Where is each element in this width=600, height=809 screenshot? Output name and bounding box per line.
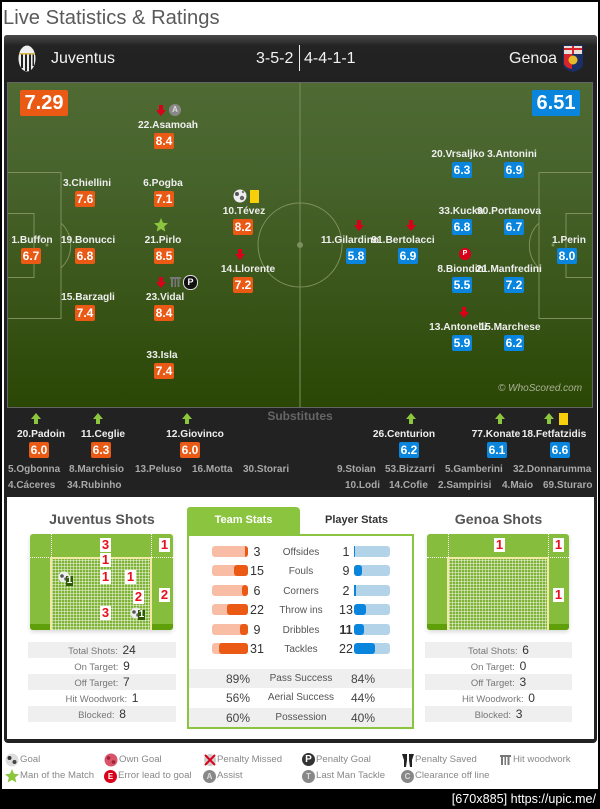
bench: Genoa: 69.Sturaro	[543, 480, 592, 491]
player: Bonucci: 6.8	[77, 249, 93, 263]
player: Pogba: 7.1	[156, 192, 172, 206]
legend: last man tackle	[302, 770, 315, 783]
chart: Juventus shot map: 1	[139, 609, 144, 620]
player: Tevez	[223, 206, 265, 235]
icon: penalty missed marker	[459, 248, 471, 260]
player: Pirlo	[144, 235, 181, 264]
bench: Juventus: 30.Storari	[243, 464, 289, 475]
chart: Genoa shot map: 1	[496, 537, 503, 552]
player: Marchese	[479, 322, 541, 351]
stat row: Offsides: Offsides	[283, 547, 319, 558]
icon: man of the match star	[154, 218, 168, 232]
stat row: Fouls	[212, 563, 390, 579]
legend: goal	[5, 753, 19, 767]
stat row: Corners: Corners	[283, 586, 319, 597]
team rating: Juventus	[20, 90, 68, 116]
sub: Giovinco: 6.0	[182, 443, 198, 457]
sub: Ceglie: 11.Ceglie	[81, 429, 125, 440]
chart: Juventus shot map: 1	[102, 569, 109, 584]
team rating: Genoa	[532, 90, 580, 116]
stat row: Corners: 6	[254, 584, 260, 598]
player: Buffon: 6.7	[23, 249, 39, 263]
stat row: Offsides: 1	[343, 545, 349, 559]
player: Pogba	[143, 178, 183, 207]
icon: hit woodwork	[170, 277, 181, 287]
chart: Juventus shot map: 2	[161, 587, 168, 602]
stat row: Offsides: 3	[254, 545, 260, 559]
player: Buffon: 1.Buffon	[11, 235, 53, 246]
stat row: Fouls: Fouls	[289, 566, 313, 577]
icon: yellow card	[559, 413, 568, 425]
legend: Own Goal	[119, 754, 162, 765]
chart: Juventus shot map: 1	[161, 537, 168, 552]
player: Manfredini: 7.2	[506, 278, 522, 292]
stat row: Pass Success: 89%	[226, 672, 250, 686]
sub: Ceglie	[81, 429, 125, 458]
formation divider	[299, 45, 300, 71]
chart: Juventus shot map: 1	[127, 569, 134, 584]
chart: Juventus shot map: 2	[135, 589, 142, 604]
legend: man of the match	[5, 769, 19, 783]
stat row: Possession: 60%	[226, 711, 250, 725]
table: Genoa shot totals	[425, 642, 572, 722]
icon: sub off	[406, 220, 416, 231]
legend: Penalty Saved	[415, 754, 477, 765]
player: Bertolacci: 91.Bertolacci	[371, 235, 435, 246]
sub: Padoin: 20.Padoin	[17, 429, 65, 440]
stat row: Tackles: Tackles	[284, 644, 318, 655]
player: Tevez: 8.2	[235, 220, 251, 234]
player: Bertolacci	[371, 235, 435, 264]
sub: Centurion: 26.Centurion	[373, 429, 435, 440]
icon: sub off	[156, 105, 166, 116]
player: Barzagli	[61, 292, 115, 321]
player: Vrsaljko: 6.3	[454, 163, 470, 177]
stat row: Dribbles: 11	[339, 623, 353, 637]
player: Chiellini: 3.Chiellini	[63, 178, 111, 189]
table: Juventus shot totals: On Target: 9	[74, 659, 130, 673]
player: Manfredini: 21.Manfredini	[476, 264, 542, 275]
heading: Genoa shots: Genoa Shots	[455, 512, 542, 528]
stat row: Possession: Possession	[275, 712, 327, 723]
player: Antonini: 3.Antonini	[487, 149, 537, 160]
stat row: Corners: 2	[343, 584, 349, 598]
sub: Giovinco	[166, 429, 224, 458]
player: Biondini	[437, 264, 487, 293]
sub: Giovinco: 12.Giovinco	[166, 429, 224, 440]
legend: clearance off line	[401, 770, 414, 783]
chart: Juventus shot map: 3	[102, 605, 109, 620]
player: Chiellini	[63, 178, 111, 207]
legend: Goal	[20, 754, 40, 765]
icon: penalty goal: P	[187, 277, 194, 287]
bench: Juventus: 34.Rubinho	[67, 480, 121, 491]
bench: Genoa: 9.Stoian	[337, 464, 376, 475]
bench: Genoa: 10.Lodi	[345, 480, 380, 491]
player: Asamoah: 8.4	[156, 134, 172, 148]
table: Genoa shot totals: Total Shots: 6	[468, 643, 529, 657]
icon: assist	[169, 104, 181, 116]
player: Manfredini	[476, 264, 542, 293]
heading: substitutes: Substitutes	[267, 409, 333, 423]
player: Kucka	[438, 206, 484, 235]
legend: error	[104, 770, 117, 783]
legend: assist	[203, 770, 216, 783]
legend: penalty goal: P	[305, 754, 312, 765]
table: Juventus shot totals: Hit Woodwork: 1	[66, 691, 138, 705]
player: Pirlo: 21.Pirlo	[145, 235, 181, 246]
player: Antonini	[487, 149, 537, 178]
sub: Fetfatzidis: 18.Fetfatzidis	[522, 429, 586, 440]
legend	[4, 750, 594, 786]
stat row: Pass Success: 84%	[351, 672, 375, 686]
player: Pirlo: 8.5	[156, 249, 172, 263]
player: Gilardino: 11.Gilardino	[321, 235, 379, 246]
bench: Genoa: 5.Gamberini	[445, 464, 503, 475]
watermark: © WhoScored.com	[498, 383, 582, 394]
legend: Clearance off line	[415, 770, 490, 781]
legend: Hit woodwork	[513, 754, 571, 765]
sub: Fetfatzidis	[525, 427, 595, 458]
stat row: Possession: 40%	[351, 711, 375, 725]
player: Kucka: 6.8	[454, 220, 470, 234]
bench: Juventus: 8.Marchisio	[69, 464, 124, 475]
player: Llorente: 14.Llorente	[221, 264, 275, 275]
player: Tevez: 10.Tévez	[223, 206, 265, 217]
crest: Genoa	[563, 45, 583, 72]
heading: Juventus shots: Juventus Shots	[49, 512, 155, 528]
stat row: Dribbles: 9	[254, 623, 260, 637]
stat row: Possession	[189, 708, 412, 727]
bench: Juventus: 16.Motta	[192, 464, 233, 475]
legend: Assist	[217, 770, 243, 781]
chart: Juventus shot map: 3	[102, 537, 109, 552]
player: Antonelli	[429, 322, 487, 351]
bench: Genoa: 2.Sampirisi	[438, 480, 491, 491]
player: Gilardino: 5.8	[348, 249, 364, 263]
sub: Padoin: 6.0	[31, 443, 47, 457]
team rating: Genoa: 6.51	[537, 92, 575, 114]
player: Llorente: 7.2	[235, 278, 251, 292]
icon: sub off	[459, 307, 469, 318]
table: Juventus shot totals: Off Target: 7	[74, 675, 130, 689]
player: Perin	[552, 235, 586, 264]
player: Gilardino	[321, 235, 379, 264]
bench: Juventus: 4.Cáceres	[8, 480, 55, 491]
legend: error: E	[108, 772, 113, 781]
icon: sub on	[93, 413, 103, 424]
icon: goal ball	[234, 190, 246, 202]
player: Marchese: 6.2	[506, 336, 522, 350]
crest: Juventus	[18, 46, 36, 72]
player: Asamoah	[138, 120, 198, 149]
player: Perin: 8.0	[559, 249, 575, 263]
player: Biondini: 8.Biondini	[437, 264, 487, 275]
icon: sub off	[156, 277, 166, 288]
bench: Genoa: 4.Maio	[502, 480, 533, 491]
source caption: [670x885] https://upic.me/	[452, 792, 596, 806]
panel: stats	[7, 497, 594, 739]
bench: Genoa: 14.Cofie	[389, 480, 428, 491]
legend: penalty missed	[203, 753, 217, 767]
chart: Juventus shot map: 1	[67, 575, 72, 586]
panel: team stats	[187, 534, 414, 729]
sub: Konate	[462, 427, 532, 458]
stat row: Tackles: 22	[339, 642, 353, 656]
icon: sub on	[182, 413, 192, 424]
stat row: Throw ins: Throw ins	[279, 605, 323, 616]
legend: hit woodwork	[500, 755, 511, 765]
pitch markings	[8, 83, 592, 407]
icon: penalty goal	[183, 275, 198, 290]
stat row: Fouls: 9	[343, 564, 349, 578]
icon: sub on	[31, 413, 41, 424]
chart: Genoa shot map: 1	[555, 587, 562, 602]
legend: penalty saved	[401, 753, 415, 767]
legend: Penalty Missed	[217, 754, 282, 765]
player: Llorente	[221, 264, 275, 293]
stat row: Throw ins: 13	[339, 603, 353, 617]
table: Juventus shot totals	[28, 642, 176, 722]
legend: assist: A	[207, 772, 212, 781]
table: Genoa shot totals: On Target: 0	[471, 659, 526, 673]
player: Biondini: 5.5	[454, 278, 470, 292]
chart: Juventus shot map	[30, 534, 173, 630]
player: Barzagli: 15.Barzagli	[61, 292, 115, 303]
panel: pitch	[8, 83, 592, 407]
tab: Team Stats	[187, 507, 300, 536]
icon: sub on	[495, 413, 505, 424]
sub: Centurion	[374, 427, 444, 458]
icon: assist: A	[172, 105, 178, 114]
player: Antonelli: 13.Antonelli	[429, 322, 487, 333]
player: Portanova	[477, 206, 542, 235]
sub: Centurion: 6.2	[401, 443, 417, 457]
player: Vidal	[146, 292, 184, 321]
table: Genoa shot totals: Off Target: 3	[471, 675, 526, 689]
player: Vidal: 23.Vidal	[146, 292, 184, 303]
table: Genoa shot totals: Blocked: 3	[475, 707, 522, 721]
stat row: Aerial Success: Aerial Success	[268, 692, 334, 703]
stat row: Dribbles: Dribbles	[283, 625, 319, 636]
stat row: Dribbles	[212, 622, 390, 638]
team name: Juventus: Juventus	[51, 50, 115, 67]
player: Kucka: 33.Kucka	[439, 206, 483, 217]
player: Vrsaljko	[431, 149, 485, 178]
header gradient bar	[4, 35, 597, 83]
player: Perin: 1.Perin	[552, 235, 586, 246]
stat row: Fouls: 15	[250, 564, 264, 578]
stat row: Throw ins: 22	[250, 603, 264, 617]
player: Antonini: 6.9	[506, 163, 522, 177]
legend: Man of the Match	[20, 770, 94, 781]
player: Bertolacci: 6.9	[400, 249, 416, 263]
stat row: Pass Success	[189, 669, 412, 688]
stat row: Aerial Success	[189, 688, 412, 708]
chart: Genoa shot map	[427, 534, 569, 630]
bench: Genoa: 53.Bizzarri	[385, 464, 435, 475]
legend: Penalty Goal	[316, 754, 371, 765]
team name: Genoa: Genoa	[509, 50, 557, 67]
stat row: Tackles: 31	[250, 642, 264, 656]
legend: Error lead to goal	[118, 770, 192, 781]
stat row: Aerial Success: 44%	[351, 691, 375, 705]
bench: Genoa: 32.Donnarumma	[513, 464, 591, 475]
tab: Player Stats: Player Stats	[325, 514, 388, 526]
table: Juventus shot totals: Total Shots: 24	[68, 643, 136, 657]
table: Genoa shot totals: Hit Woodwork: 0	[462, 691, 535, 705]
team rating: Juventus: 7.29	[25, 92, 63, 114]
bench: Juventus	[8, 463, 288, 493]
player: Chiellini: 7.6	[77, 192, 93, 206]
bench: Juventus: 13.Peluso	[135, 464, 182, 475]
stat row: Offsides	[212, 544, 390, 560]
icon: sub off	[354, 220, 364, 231]
sub: Ceglie: 6.3	[93, 443, 109, 457]
player: Portanova: 90.Portanova	[477, 206, 541, 217]
player: Portanova: 6.7	[506, 220, 522, 234]
legend: clearance off line: C	[405, 772, 410, 781]
chart: Genoa shot map: 1	[555, 537, 562, 552]
stat row: Throw ins	[212, 602, 390, 618]
legend: Last Man Tackle	[316, 770, 385, 781]
icon: penalty missed marker: P	[463, 250, 467, 257]
icon: sub off	[235, 249, 245, 260]
formation: away: 4-4-1-1	[304, 50, 356, 67]
player: Antonelli: 5.9	[454, 336, 470, 350]
icon: sub on	[406, 413, 416, 424]
player: Isla: 33.Isla	[146, 350, 178, 361]
tab: Team Stats: Team Stats	[215, 514, 272, 526]
player: Vrsaljko: 20.Vrsaljko	[431, 149, 485, 160]
player: Vidal: 8.4	[156, 306, 172, 320]
sub: Fetfatzidis: 6.6	[552, 443, 568, 457]
player: Marchese: 15.Marchese	[479, 322, 541, 333]
player: Buffon	[11, 235, 53, 264]
stat row: Corners	[212, 583, 390, 599]
player: Bonucci	[61, 235, 115, 264]
player: Isla: 7.4	[156, 364, 172, 378]
sub: Konate: 77.Konate	[472, 429, 520, 440]
player: Pogba: 6.Pogba	[143, 178, 183, 189]
player: Isla	[146, 350, 178, 379]
player: Asamoah: 22.Asamoah	[138, 120, 198, 131]
bench: Genoa	[337, 463, 593, 493]
icon: yellow card	[250, 190, 259, 203]
stat row: Aerial Success: 56%	[226, 691, 250, 705]
stat row: Tackles	[212, 641, 390, 657]
legend: own goal	[104, 753, 118, 767]
chart: Juventus shot map: 1	[102, 552, 109, 567]
stat row: Pass Success: Pass Success	[270, 673, 332, 684]
sub: Konate: 6.1	[489, 443, 505, 457]
table: Juventus shot totals: Blocked: 8	[78, 707, 126, 721]
player: Bonucci: 19.Bonucci	[61, 235, 115, 246]
formation: home: 3-5-2	[256, 50, 293, 67]
legend: last man tackle: T	[306, 772, 311, 781]
sub: Padoin	[17, 429, 65, 458]
icon: sub on	[544, 413, 554, 424]
bench: Juventus: 5.Ogbonna	[8, 464, 60, 475]
legend: penalty goal	[302, 753, 315, 766]
title: Live Statistics & Ratings	[3, 7, 220, 29]
player: Barzagli: 7.4	[77, 306, 93, 320]
